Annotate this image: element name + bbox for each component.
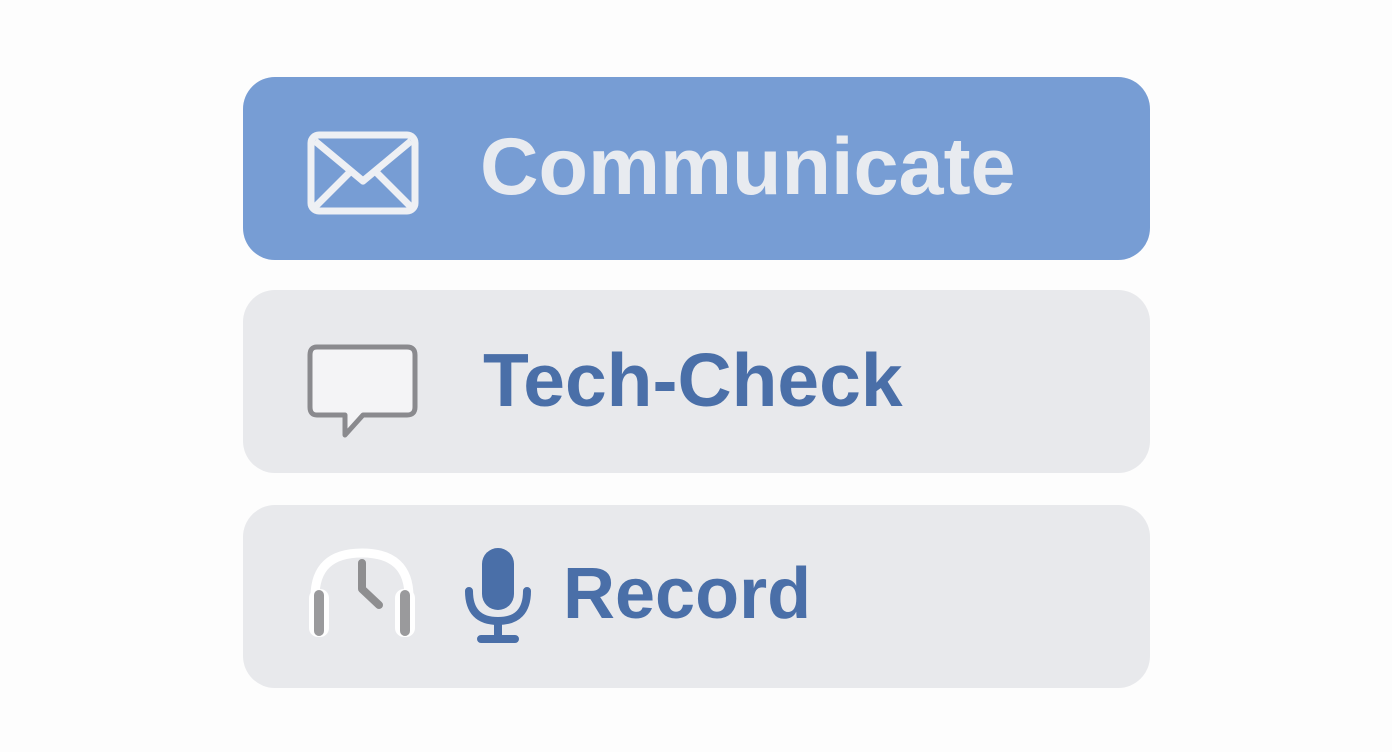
icon: envelope bbox=[308, 132, 418, 214]
icon: speech bubble bbox=[308, 344, 418, 438]
icon: microphone bbox=[465, 548, 531, 643]
icon: headphones clock bbox=[309, 548, 415, 637]
heading: Record: Record bbox=[563, 554, 811, 634]
heading: Tech-Check: Tech-Check bbox=[483, 338, 903, 422]
panel: communicate bbox=[243, 77, 1150, 260]
panel: tech-check bbox=[243, 290, 1150, 473]
panel: record bbox=[243, 505, 1150, 688]
heading: Communicate: Communicate bbox=[480, 122, 1016, 212]
